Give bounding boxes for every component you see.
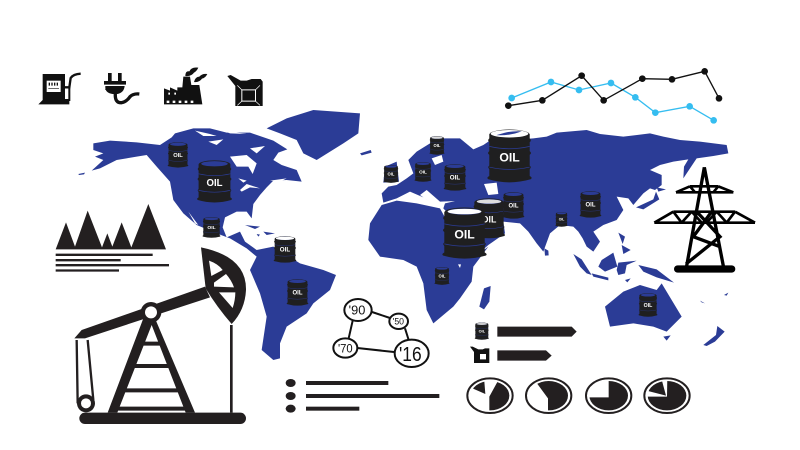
bubble: '90: '90 [349,304,365,318]
barrel: Mexico: OIL [207,225,216,231]
barrel: Canada [168,142,188,168]
barrel: Venezuela: OIL [280,247,290,254]
barrel: Norway [429,136,445,155]
barrel: Iran: OIL [509,204,519,210]
barrel: India [555,212,568,227]
icon: fuel pump [38,74,81,104]
map: Eurasia, Africa and Oceania [360,130,728,346]
Arctic gaps and Hudson Bay [188,131,287,225]
icon: transmission tower [654,167,755,271]
pie chart 1 [467,377,517,417]
small barrel icon: OIL [479,329,486,334]
barrel: Brazil [287,279,308,306]
polished rod [230,325,233,413]
barrel: Norway: OIL [434,143,441,148]
barrel: Britain: OIL [388,172,395,177]
arrow bar: oil [497,327,577,337]
barrel: Australia [639,293,657,317]
walking beam [74,287,210,338]
pie chart 3 [585,377,632,414]
barrel: Iraq: OIL [482,214,497,225]
Eurasia [382,130,728,257]
Madagascar [479,286,491,309]
barrel: Iran [503,192,524,219]
series: cyan [508,79,717,124]
barrel: Germany: OIL [419,170,427,175]
barrel: Saudi Arabia [442,207,487,259]
barrel: Russia [487,129,532,182]
barrel: Russia: OIL [499,150,520,164]
series: black [505,68,722,109]
Tasmania and New Zealand [663,293,728,346]
barrel: Mexico [203,217,220,238]
pie chart 2 [526,378,573,417]
mountain peaks [56,204,166,249]
icon: factory [164,67,207,104]
icon: electric plug [104,73,139,103]
bullet row 2 [286,392,439,400]
barrel: Britain [383,165,399,183]
bubble: '16: '16 [399,343,422,366]
barrel: Eastern Europe: OIL [450,175,460,182]
pie chart 4 [643,377,691,414]
barrel: Saudi Arabia: OIL [454,228,475,241]
icon: jerry can [227,75,263,106]
bubble: '50: '50 [393,317,404,327]
horse head [201,247,246,324]
Sri Lanka [544,248,549,256]
barrel: China: OIL [586,203,596,209]
mountain area chart with text lines [56,204,169,272]
barrel: United States [197,160,232,202]
bubble: '70: '70 [338,342,353,355]
Africa [368,201,488,323]
bullet row 3 [286,405,359,413]
pie charts [467,377,693,417]
arrow bar: fuel [497,350,552,361]
Black Sea, Baltic and other water gaps [432,155,498,268]
barrel: Australia: OIL [644,303,653,309]
timeline bubbles [333,299,429,367]
pivot [141,302,161,323]
map: Americas and Greenland [78,110,360,360]
barrel: Eastern Europe [444,164,466,191]
bullet list [286,379,439,413]
barrel: Brazil: OIL [293,291,303,297]
top icons row [38,67,263,106]
infographic canvas [38,68,756,424]
small jerry can icon [470,347,489,363]
barrel: Iraq [473,198,505,238]
barrel: Germany [415,162,431,182]
Southeast Asia islands [573,233,674,283]
barrel: Canada: OIL [173,153,183,159]
Aleutian islands [78,173,85,175]
North and South America [92,128,336,360]
Caribbean islands [245,225,275,237]
line chart [505,68,722,124]
icon: oil pump jack [74,247,246,424]
Iceland and Britain [360,150,399,183]
Japan [636,187,666,209]
barrel: India: OIL [559,218,564,222]
legend lines [56,254,169,272]
bullet row 1 [286,379,388,387]
pump base [79,413,246,424]
barrel: Central Africa: OIL [439,274,446,279]
barrel: Central Africa [434,267,450,285]
arrow bar legend [470,322,577,363]
cable and pulley [77,340,93,403]
A-frame derrick [108,318,195,413]
barrel: Venezuela [274,236,296,263]
barrel: United States: OIL [206,178,223,189]
Greenland [267,110,360,160]
world map [78,110,728,360]
barrel: China [580,191,601,218]
Australia [605,283,682,332]
